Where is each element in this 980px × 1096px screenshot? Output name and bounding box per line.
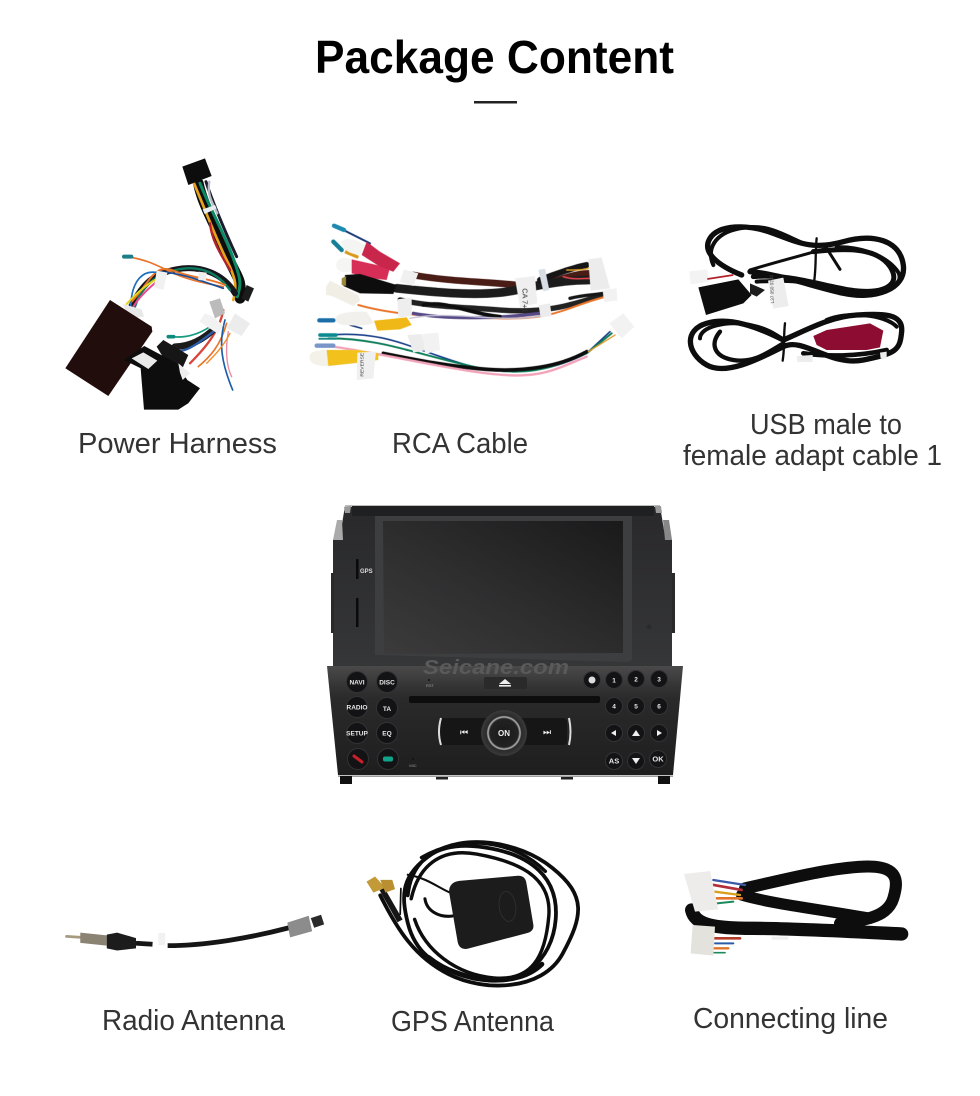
right buttons: 4 <box>612 704 616 710</box>
right buttons: 3 <box>657 676 661 684</box>
right buttons: 6 <box>657 704 661 710</box>
panel: head unit <box>327 505 683 784</box>
left buttons: NAVI <box>349 680 365 686</box>
label: power harness: Power Harness <box>78 428 277 460</box>
label: rca cable: RCA Cable <box>392 428 528 460</box>
image: usb cable: L37 050 0202 <box>769 274 775 303</box>
transport controls: ⏮ <box>460 727 468 737</box>
gps slot: GPS <box>360 569 373 575</box>
gps slot <box>356 559 373 627</box>
image: power harness cable <box>65 158 254 410</box>
panel: usb adapt cable <box>683 227 942 472</box>
right buttons <box>584 670 668 770</box>
right buttons: OK <box>652 754 664 764</box>
image: rca cable: REVERSE <box>359 352 365 377</box>
image: connecting line <box>684 867 902 956</box>
image: radio antenna <box>67 915 324 950</box>
panel: radio antenna <box>67 915 324 1037</box>
transport controls: ON <box>498 729 510 738</box>
right buttons: AS <box>609 756 619 766</box>
image: rca cable <box>309 226 634 380</box>
label: connecting line: Connecting line <box>693 1003 888 1035</box>
panel: rca cable <box>309 226 634 460</box>
panel: connecting line <box>684 867 902 1035</box>
reset and mic: MIC <box>409 763 417 768</box>
left buttons: TA <box>383 706 391 713</box>
image: rca cable: CA 7+1 <box>521 288 530 313</box>
panel: power harness <box>65 158 277 460</box>
label: usb adapt cable: female adapt cable 1 <box>683 440 942 472</box>
label: usb adapt cable <box>683 409 942 472</box>
label: gps antenna: GPS Antenna <box>391 1006 555 1038</box>
title: Package Content <box>315 31 674 83</box>
faceplate <box>327 666 683 784</box>
right buttons: 5 <box>634 704 638 710</box>
reset and mic: RST <box>426 683 435 688</box>
label: usb adapt cable: USB male to <box>750 409 902 441</box>
image: usb cable <box>689 227 904 369</box>
right buttons: 1 <box>612 678 616 684</box>
left buttons: RADIO <box>347 704 367 712</box>
left buttons: SETUP <box>346 730 368 738</box>
reset and mic <box>409 679 435 768</box>
title underline <box>474 101 517 104</box>
transport controls: ⏭ <box>543 727 551 737</box>
eject button <box>484 677 527 689</box>
cd slot <box>409 696 600 703</box>
label: radio antenna: Radio Antenna <box>102 1005 286 1037</box>
left buttons <box>346 672 398 770</box>
right buttons: 2 <box>634 676 638 684</box>
image: gps antenna <box>366 842 578 986</box>
left buttons: DISC <box>379 680 395 686</box>
left buttons: EQ <box>382 730 392 738</box>
watermark: Seicane.com <box>423 657 569 679</box>
housing <box>331 505 675 666</box>
panel: gps antenna <box>366 842 578 1038</box>
transport controls <box>439 710 570 756</box>
screen <box>383 521 623 654</box>
